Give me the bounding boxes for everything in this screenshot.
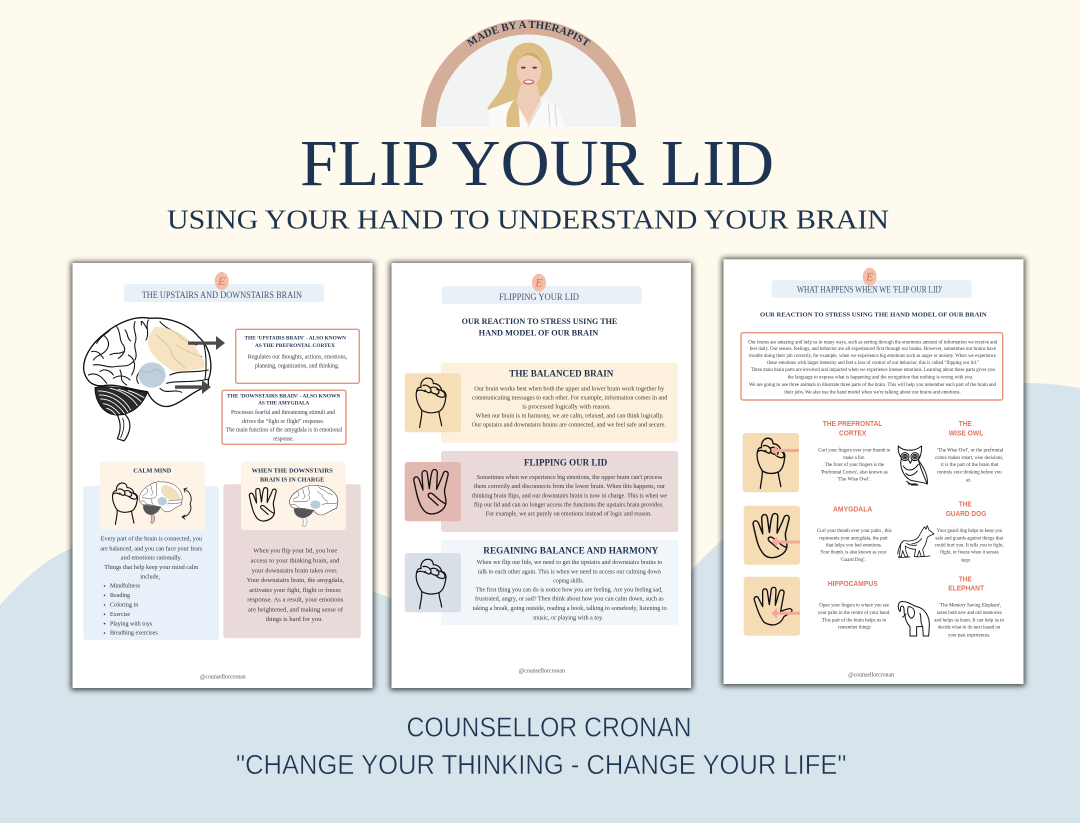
row: hippocampus and elephant: ELEPHANT — [948, 584, 984, 593]
row: hippocampus and elephant: remember things — [838, 625, 871, 630]
panel: balanced brain: Our upstairs and downstairs brains are connected, and we feel safe and secure. — [472, 422, 667, 429]
panel: balanced brain: Our brain works best when both the upper and lower brain work together by — [474, 387, 664, 393]
downstairs brain callout: AS THE AMYGDALA — [258, 401, 309, 407]
calm mind list: Playing with toys — [110, 621, 153, 627]
row: hippocampus and elephant: and helps us learn. It can help us to — [934, 618, 1004, 623]
calm mind text — [100, 536, 203, 580]
panel: flipping our lid: For example, we act purely on emotions instead of logic and reason. — [486, 511, 652, 518]
panel: regaining balance: music, or playing with a toy. — [533, 615, 604, 621]
subtitle: USING YOUR HAND TO UNDERSTAND YOUR BRAIN — [167, 204, 889, 234]
downstairs in charge panel: BRAIN IS IN CHARGE — [260, 477, 324, 484]
row: hippocampus and elephant: Open your fingers to where you see — [819, 604, 890, 609]
icon: curved arrows — [182, 488, 191, 519]
icon: fist — [416, 559, 446, 609]
downstairs text: are heightened, and making sense of — [248, 606, 343, 613]
icon: small brain — [139, 482, 182, 524]
panel: regaining balance: coping skills. — [553, 579, 584, 585]
downstairs brain callout: The main function of the amygdala is in emotional — [226, 426, 343, 433]
row: amygdala and guard dog: GUARD DOG — [946, 509, 986, 518]
row: prefrontal cortex and wise owl: WISE OWL — [949, 428, 984, 437]
row: amygdala and guard dog: represents your amygdala, the part — [819, 536, 888, 541]
panel: flipping our lid — [405, 451, 678, 532]
subheading: HAND MODEL OF OUR BRAIN — [479, 329, 599, 338]
intro callout: Three main brain parts are involved and impacted when we experience intense emotions. Learning about these parts gives you — [751, 368, 995, 373]
calm mind text: are balanced, and you can face your fears — [100, 545, 203, 552]
arrow to upstairs box — [188, 336, 225, 350]
calm mind text: Every part of the brain is connected, you — [101, 536, 202, 543]
header bar — [442, 286, 642, 304]
balanced brain text: THE BALANCED BRAIN — [509, 370, 613, 380]
calm mind list: Breathing exercises — [110, 631, 158, 637]
arrow to downstairs box — [175, 380, 211, 394]
badge text on arc — [430, 28, 628, 127]
downstairs brain callout: drives the “fight or flight” response. — [242, 418, 325, 425]
row: prefrontal cortex and wise owl: CORTEX — [839, 428, 866, 437]
intro callout: Our brains are amazing and help us in many ways, such as sorting through the enormous amount of information we receive and — [748, 340, 998, 345]
panel: regaining balance: taking a break, going outside, reading a book, talking to somebody, listening to — [473, 606, 667, 612]
therapist portrait arch — [421, 20, 636, 127]
title: FLIP YOUR LID — [300, 127, 774, 200]
card 2: flipping your lid — [390, 262, 692, 690]
header bar — [772, 280, 972, 298]
subheading — [462, 317, 617, 338]
footer tagline: "CHANGE YOUR THINKING - CHANGE YOUR LIFE" — [236, 749, 846, 780]
header bar — [124, 284, 324, 302]
row: hippocampus and elephant: saves both new and old memories — [937, 611, 1002, 616]
logo mark — [215, 272, 229, 290]
downstairs text: your downstairs brain takes over. — [252, 568, 338, 574]
icon: fist — [416, 378, 446, 427]
calm mind list — [104, 583, 158, 637]
icon: fist — [112, 483, 138, 524]
row: amygdala and guard dog: THE — [959, 499, 972, 508]
row: amygdala and guard dog: AMYGDALA — [833, 505, 873, 514]
intro callout: feel daily. Our senses, feelings, and behavior are all experienced first through our brains. However, sometimes our brains have — [750, 347, 997, 352]
panel: flipping our lid: flip our lid and can no longer access the functions the upstairs brain provides. — [474, 501, 664, 508]
row: prefrontal cortex and wise owl: 'The Wise Owl'. — [837, 477, 871, 482]
calm mind list: Exercise — [110, 612, 130, 618]
icon: elephant — [898, 602, 929, 636]
downstairs text: access to your thinking brain, and — [251, 558, 339, 564]
flipping text: FLIPPING OUR LID — [524, 459, 607, 469]
icon: owl — [898, 446, 927, 485]
calm mind text: Things that help keep your mind calm — [104, 565, 199, 571]
footer brand name: COUNSELLOR CRONAN — [406, 712, 692, 743]
row: prefrontal cortex and wise owl: 'The Wise Owl', or the prefrontal — [937, 449, 1004, 454]
row: amygdala and guard dog: safe and guards against things that — [935, 536, 1004, 541]
downstairs brain callout: THE 'DOWNSTAIRS BRAIN' - ALSO KNOWN — [227, 394, 340, 400]
icon: guard dog — [898, 526, 934, 558]
logo mark: E — [217, 274, 226, 288]
icon: fist with arrow — [757, 438, 799, 488]
intro callout: We are going to use three animals to illustrate three parts of the brain. This will help you remember each part of the brain and — [749, 383, 996, 388]
header bar: WHAT HAPPENS WHEN WE 'FLIP OUR LID' — [797, 286, 943, 296]
footer handle: @counsellorcronan — [848, 673, 894, 679]
header bar: THE UPSTAIRS AND DOWNSTAIRS BRAIN — [142, 291, 302, 301]
upstairs brain callout: AS THE PREFRONTAL CORTEX — [255, 343, 335, 349]
row: prefrontal cortex and wise owl: 'Prefrontal Cortex', also known as — [821, 470, 888, 475]
card 3: what happens when we flip our lid — [722, 258, 1025, 686]
row: prefrontal cortex and wise owl: it is the part of the brain that — [941, 463, 999, 468]
row: hippocampus and elephant: your palm in the centre of your hand. — [818, 611, 890, 616]
panel: flipping our lid: Sometimes when we experience big emotions, the upper brain can't process — [477, 475, 663, 481]
row: hippocampus and elephant: HIPPOCAMPUS — [828, 579, 878, 588]
logo mark: E — [865, 270, 874, 284]
downstairs text: Your downstairs brain, the amygdala, — [247, 578, 345, 584]
calm mind list: Mindfulness — [110, 583, 141, 590]
upstairs brain callout — [236, 329, 359, 383]
intro callout: their jobs. We also use the hand model when we're talking about our brains and emotions. — [784, 390, 961, 395]
logo mark — [532, 274, 546, 292]
row: prefrontal cortex and wise owl: THE PREFRONTAL — [823, 419, 883, 428]
calm mind list: Coloring in — [110, 603, 138, 609]
downstairs brain callout: response. — [273, 437, 294, 443]
calm mind text: include, — [140, 574, 161, 580]
row: hippocampus and elephant: 'The Memory Saving Elephant', — [939, 604, 1001, 609]
icon: hand with arrow — [753, 514, 800, 558]
intro callout — [741, 333, 1003, 400]
panel: flipping our lid: thinking brain flips, and our downstairs brain is now in charge. This is when we — [472, 492, 667, 499]
row: amygdala and guard dog: that helps you feel emotions. — [826, 543, 882, 548]
arch ring — [421, 20, 636, 127]
intro callout: trouble doing their job correctly, for example, when we experience big emotions such as anger or anxiety. When we experience — [749, 354, 997, 359]
icon: open hand with arrow — [754, 587, 800, 625]
icon: flipped hand — [414, 470, 448, 514]
downstairs brain callout: Processes fearful and threatening stimuli and — [231, 409, 335, 416]
panel: flipping our lid: them correctly and disconnects from the lower brain. When this happens, our — [474, 483, 665, 490]
intro callout: the language to express what is happening and the recognition that nothing is wrong with you. — [788, 376, 973, 381]
logo mark — [863, 268, 877, 286]
panel: regaining balance: talk to each other again. This is when we need to access our calming down — [478, 570, 661, 576]
footer handle: @counsellorcronan — [200, 674, 246, 680]
panel: regaining balance: frustrated, angry, or sad? Then think about how you can calm down, such as — [475, 596, 664, 603]
row: amygdala and guard dog: 'Guard Dog'. — [840, 558, 866, 563]
subheading: OUR REACTION TO STRESS USING THE HAND MODEL OF OUR BRAIN — [760, 311, 987, 318]
row: amygdala and guard dog: Curl your thumb over your palm , this — [817, 529, 892, 534]
logo mark: E — [534, 276, 543, 290]
downstairs text: things is hard for you. — [266, 616, 324, 623]
row: hippocampus and elephant: your past experiences. — [948, 633, 990, 638]
portrait photo — [436, 34, 621, 127]
regaining text: REGAINING BALANCE AND HARMONY — [483, 546, 658, 556]
panel: regaining balance: The first thing you can do is notice how you are feeling. Are you feeling sad, — [476, 586, 663, 593]
downstairs text: When you flip your lid, you lose — [253, 548, 338, 555]
footer handle: @counsellorcronan — [519, 669, 565, 675]
downstairs text: response. As a result, your emotions — [247, 598, 344, 604]
therapist portrait arch: MADE BY A THERAPIST — [466, 20, 591, 47]
panel: balanced brain: When our brain is in harmony, we are calm, relaxed, and can think logically. — [476, 413, 664, 419]
row: prefrontal cortex and wise owl: make a fist. — [843, 456, 865, 461]
row: prefrontal cortex and wise owl: cortex makes smart, wise decisions, — [935, 456, 1003, 461]
row: amygdala and guard dog: Your guard dog helps to keep you — [937, 529, 1003, 534]
downstairs text — [247, 548, 345, 623]
upstairs brain callout: Regulates our thoughts, actions, emotions, — [248, 355, 348, 361]
row: prefrontal cortex and wise owl: act. — [966, 478, 971, 483]
panel: regaining balance: When we flip our lids, we need to get the upstairs and downstairs brains to — [477, 559, 662, 566]
panel: balanced brain — [405, 363, 678, 443]
row: prefrontal cortex and wise owl — [743, 419, 1004, 492]
calm mind panel — [83, 462, 219, 640]
row: hippocampus and elephant: This part of the brain helps us to — [822, 618, 887, 623]
upstairs brain callout: planning, organization, and thinking. — [255, 364, 340, 370]
icon: flipped hand — [249, 488, 276, 521]
calm mind list: Reading — [110, 593, 130, 599]
panel: balanced brain: communicating messages to each other. For example, information comes in and — [472, 394, 667, 401]
brain illustration — [84, 318, 211, 441]
row: amygdala and guard dog: danger. — [961, 559, 971, 564]
intro callout: these emotions with larger intensity and feel a loss of control of our behavior, this is called "flipping our lid." — [767, 361, 979, 366]
downstairs in charge panel: WHEN THE DOWNSTAIRS — [252, 468, 333, 475]
icon: small brain — [289, 485, 338, 527]
subheading: OUR REACTION TO STRESS USING THE — [462, 317, 617, 326]
upstairs brain callout: THE 'UPSTAIRS BRAIN' - ALSO KNOWN — [244, 336, 346, 342]
row: amygdala and guard dog: Your thumb, is also known as your — [820, 551, 887, 556]
row: prefrontal cortex and wise owl: The front of your fingers is the — [825, 463, 885, 468]
calm mind panel: CALM MIND — [133, 468, 172, 475]
downstairs brain callout — [222, 390, 346, 444]
row: amygdala and guard dog: flight, or freeze when it senses — [940, 551, 999, 556]
row: hippocampus and elephant: THE — [959, 574, 972, 583]
calm mind text: and emotions rationally. — [121, 556, 183, 562]
card 1: the upstairs and downstairs brain — [71, 262, 374, 690]
row: prefrontal cortex and wise owl: Curl your fingers over your thumb to — [818, 449, 891, 454]
downstairs text: activates your fight, flight or freeze — [249, 587, 341, 594]
row: hippocampus and elephant: decide what to do next based on — [938, 625, 1001, 630]
row: prefrontal cortex and wise owl: controls your thinking before you — [937, 470, 1002, 475]
row: amygdala and guard dog — [744, 499, 1004, 565]
row: hippocampus and elephant — [744, 574, 1004, 638]
panel: regaining balance — [405, 540, 678, 625]
downstairs in charge panel — [223, 462, 361, 638]
row: prefrontal cortex and wise owl: THE — [959, 419, 972, 428]
panel: balanced brain: is processed logically with reason. — [522, 404, 612, 410]
header bar: FLIPPING YOUR LID — [499, 293, 579, 303]
background blue wave — [0, 383, 1080, 823]
row: amygdala and guard dog: could hurt you. It tells you to fight, — [935, 543, 1004, 548]
